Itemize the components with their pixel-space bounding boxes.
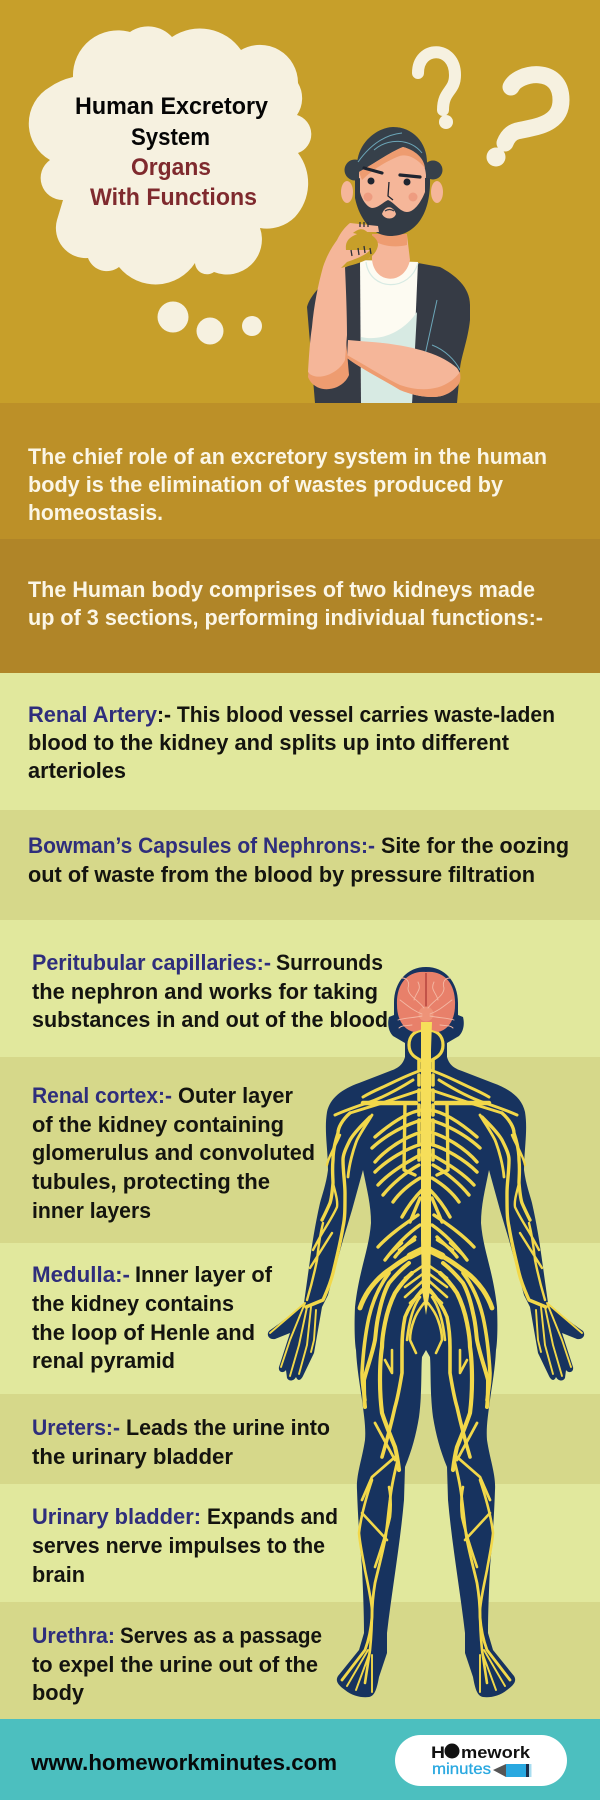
panel: peritubular capillaries: the nephron and works for taking (32, 979, 378, 1004)
logo: mework (461, 1743, 531, 1762)
panel: renal cortex: glomerulus and convoluted (32, 1140, 315, 1165)
panel: ureters: Leads the urine into (126, 1415, 330, 1440)
spinal cord (421, 1022, 432, 1315)
panel: renal artery: Renal Artery (28, 702, 158, 727)
panel: renal cortex: tubules, protecting the (32, 1169, 270, 1194)
panel: renal cortex (0, 1057, 600, 1243)
panel: medulla: Inner layer of (135, 1262, 273, 1287)
panel: ureters: the urinary bladder (32, 1444, 233, 1469)
panel: medulla: the kidney contains (32, 1291, 234, 1316)
thinking man (307, 127, 470, 403)
panel: urethra: Serves as a passage (120, 1623, 322, 1648)
panel: urinary bladder: serves nerve impulses to the (32, 1533, 325, 1558)
panel: renal cortex: Renal cortex:- (32, 1083, 172, 1108)
panel: ureters (0, 1394, 600, 1484)
panel: peritubular capillaries: Surrounds (276, 950, 383, 975)
human body nervous system figure (268, 967, 584, 1697)
panel: medulla: Medulla:- (32, 1262, 130, 1287)
panel: header (0, 0, 600, 404)
logo (395, 1735, 567, 1786)
panel: renal artery: :- This blood vessel carries waste-laden (157, 702, 555, 727)
panel: urinary bladder: Urinary bladder: (32, 1504, 201, 1529)
panel: peritubular capillaries: substances in and out of the blood (32, 1007, 388, 1032)
panel: Bowman's capsules (0, 810, 600, 920)
title: Human Excretory (75, 93, 269, 120)
panel: medulla: the loop of Henle and (32, 1320, 255, 1345)
panel: Bowman's capsules: Site for the oozing (381, 833, 569, 858)
panel: urethra (0, 1602, 600, 1719)
panel: urinary bladder (0, 1484, 600, 1602)
panel: footer (0, 1719, 600, 1800)
logo: minutes (432, 1761, 491, 1778)
icon: brain (397, 972, 455, 1032)
title (75, 93, 269, 211)
thought cloud (29, 26, 311, 284)
panel: intro two kidneys: up of 3 sections, performing individual functions:- (28, 605, 543, 630)
panel: ureters: Ureters:- (32, 1415, 120, 1440)
panel: renal cortex: inner layers (32, 1198, 151, 1223)
panel: intro role of excretory system: body is the elimination of wastes produced by (28, 472, 504, 497)
panel: intro two kidneys: The Human body comprises of two kidneys made (28, 577, 535, 602)
icon: small question mark (418, 52, 455, 129)
panel: intro two kidneys (0, 539, 600, 673)
panel: urinary bladder: brain (32, 1562, 85, 1587)
panel: renal artery: blood to the kidney and splits up into different (28, 730, 510, 755)
panel: renal cortex: of the kidney containing (32, 1112, 284, 1137)
panel: urethra: Urethra: (32, 1623, 115, 1648)
panel: renal artery (0, 673, 600, 810)
panel: peritubular capillaries (0, 920, 600, 1057)
title: Organs (131, 154, 211, 181)
icon: large question mark (486, 75, 561, 166)
thought bubbles (158, 302, 262, 344)
title: System (131, 124, 210, 151)
panel: urinary bladder: Expands and (207, 1504, 338, 1529)
website url: www.homeworkminutes.com (30, 1750, 337, 1775)
title: With Functions (90, 184, 257, 211)
panel: medulla: renal pyramid (32, 1348, 175, 1373)
panel: renal cortex: Outer layer (178, 1083, 293, 1108)
panel: urethra: to expel the urine out of the (32, 1652, 318, 1677)
panel: intro role of excretory system (0, 403, 600, 539)
panel: Bowman's capsules: out of waste from the blood by pressure filtration (28, 862, 535, 887)
panel: peritubular capillaries: Peritubular capillaries:- (32, 950, 271, 975)
icon: pencil (493, 1764, 532, 1777)
panel: renal artery: arterioles (28, 758, 126, 783)
panel: intro role of excretory system: The chief role of an excretory system in the human (28, 444, 547, 469)
panel: urethra: body (32, 1680, 85, 1705)
logo: H (431, 1743, 445, 1762)
panel: Bowman's capsules: Bowman’s Capsules of Nephrons:- (28, 833, 375, 858)
panel: medulla (0, 1243, 600, 1394)
panel: intro role of excretory system: homeostasis. (28, 500, 163, 525)
